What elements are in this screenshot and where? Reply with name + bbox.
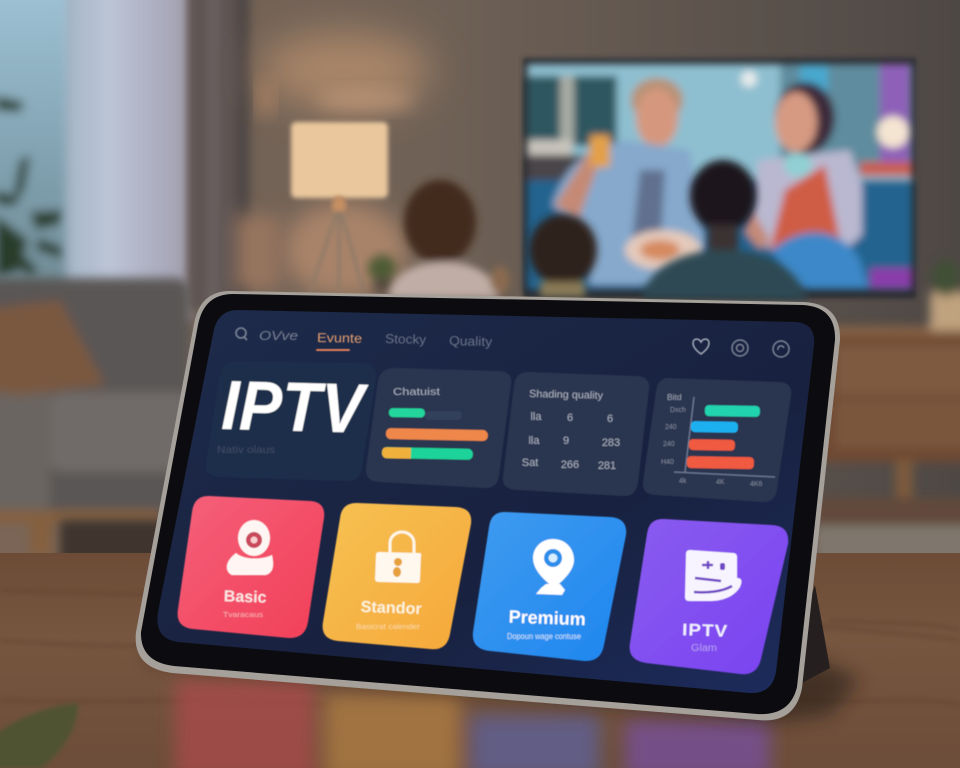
icon: location pin	[533, 539, 574, 595]
tablet	[136, 291, 840, 720]
top navigation bar	[236, 328, 789, 357]
sheer curtain	[66, 0, 190, 320]
card caption: Glam	[691, 643, 717, 654]
bar chart: 240	[665, 424, 677, 431]
tablet stand	[790, 585, 830, 684]
small plant	[368, 255, 396, 293]
viewer: child	[529, 214, 597, 297]
quality table values: 9	[563, 435, 569, 447]
card: Standard	[323, 503, 471, 649]
icon: heart	[693, 339, 709, 354]
icon: padlock	[375, 532, 421, 583]
icon: settings circle	[773, 341, 789, 357]
quality table values: 6	[567, 412, 573, 424]
quality table values: Sat	[522, 457, 538, 469]
nav item: active: Evunte	[317, 330, 362, 346]
icon: profile circle	[732, 340, 748, 356]
bar chart: 4K	[716, 479, 725, 486]
nav item: Stocky	[385, 331, 427, 347]
tablet black bezel	[141, 294, 835, 714]
quality table values: 281	[598, 460, 616, 472]
nav item: Quality	[449, 333, 493, 349]
card: IPTV	[630, 519, 788, 674]
bar chart	[661, 392, 775, 488]
wooden table	[0, 553, 960, 768]
bar chart: Bitd	[667, 392, 682, 402]
card label: IPTV	[682, 620, 729, 641]
panel: IPTV title	[206, 361, 376, 481]
sofa	[0, 278, 190, 556]
card caption: Dopoun wage contuse	[507, 632, 582, 641]
icon: webcam	[227, 520, 273, 575]
IPTV heading: IPTV	[221, 366, 369, 448]
nav item: OVve	[259, 328, 298, 343]
card caption: Tvaracaus	[223, 610, 263, 619]
panel heading: Chatuist	[393, 386, 440, 398]
tablet metal frame	[136, 291, 840, 720]
quality table values: lla	[528, 435, 540, 447]
card label: Premium	[508, 607, 586, 629]
card label: Basic	[224, 588, 267, 607]
bar chart: 4k	[679, 478, 687, 485]
tv viewers	[388, 160, 808, 300]
bar chart: 240	[663, 441, 675, 448]
viewer: woman	[388, 180, 498, 298]
card label: Standor	[360, 599, 422, 618]
reflections on table	[175, 680, 770, 768]
quality table values: 6	[607, 413, 613, 425]
panel: bar chart	[643, 378, 791, 502]
icon: smiling device	[685, 550, 741, 601]
foreground leaf	[0, 703, 78, 768]
tablet shadow	[145, 640, 860, 722]
window with plant	[0, 0, 75, 300]
bar chart: 4K6	[750, 481, 763, 488]
icon: search	[236, 328, 247, 340]
active underline	[316, 349, 350, 351]
viewer: man	[642, 160, 808, 300]
quality table values: 283	[602, 437, 620, 449]
tablet screen	[157, 310, 814, 693]
card: Premium	[473, 512, 626, 661]
IPTV caption: Nativ olaus	[217, 444, 275, 456]
floor lamp	[291, 122, 388, 292]
card: Basic	[178, 496, 324, 638]
television	[523, 58, 916, 298]
dark curtain	[188, 0, 250, 310]
sideboard with pot	[815, 260, 960, 515]
panel: channels	[366, 368, 511, 488]
panel heading: Shading quality	[529, 388, 604, 402]
quality table values: 266	[561, 459, 579, 471]
panel: streaming quality table	[503, 372, 649, 496]
quality table values	[522, 411, 620, 472]
floor and rug	[60, 498, 960, 605]
bar chart: H40	[661, 459, 674, 466]
bar chart: Dxch	[670, 407, 686, 414]
progress bars	[382, 408, 488, 460]
quality table values: lla	[530, 411, 542, 423]
card caption: Basicrat calender	[356, 622, 421, 631]
wall glow above and around the lamp	[235, 32, 430, 298]
